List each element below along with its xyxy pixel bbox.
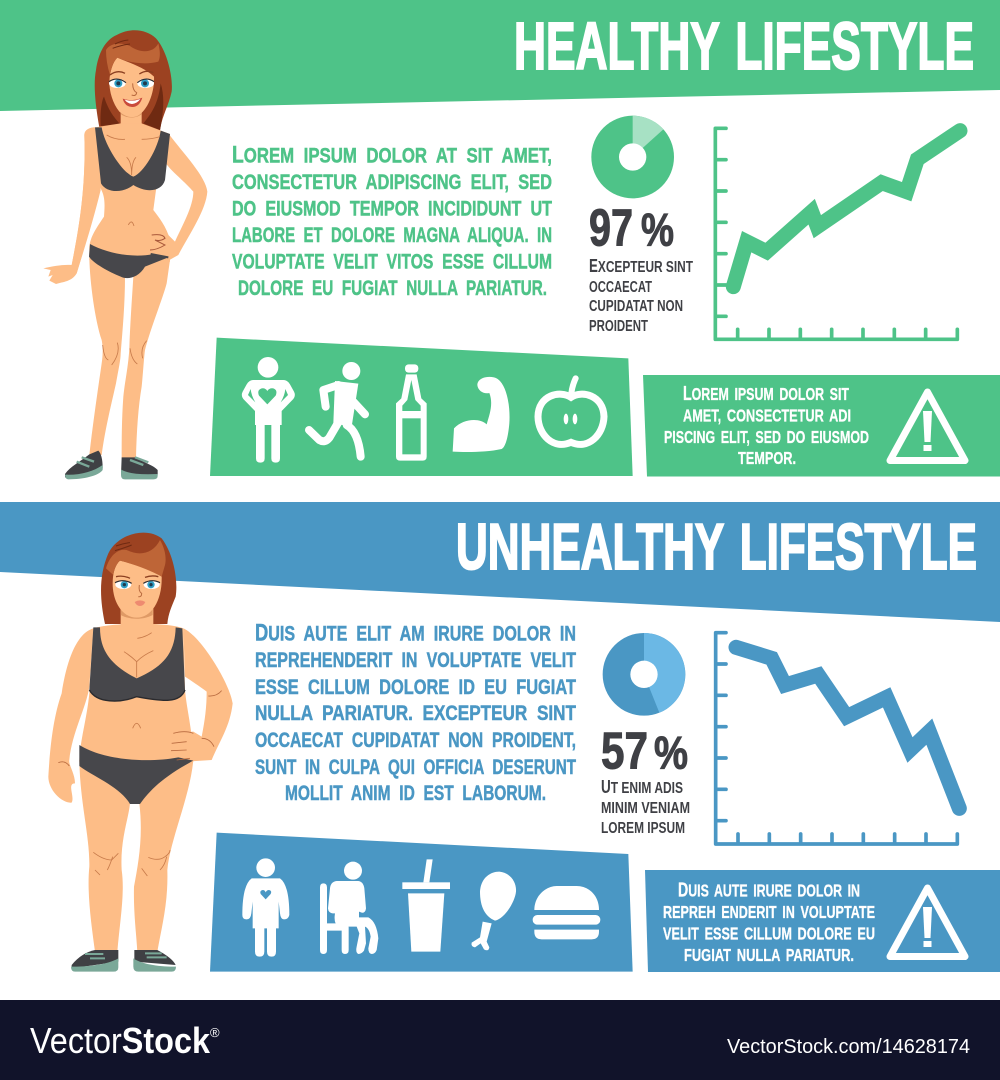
icon: overweight person with heart bbox=[242, 858, 289, 957]
callout text: TEMPOR. bbox=[738, 448, 796, 468]
stat: 97 percent: 97 bbox=[589, 200, 633, 258]
stat: 57 percent: 57 bbox=[601, 722, 648, 780]
text block: unhealthy description: MOLLIT ANIM ID EST LABORUM. bbox=[285, 782, 546, 805]
text block: unhealthy description: OCCAECAT CUPIDATAT NON PROIDENT, bbox=[255, 729, 576, 752]
text block: unhealthy description: NULLA PARIATUR. EXCEPTEUR SINT bbox=[255, 702, 576, 725]
panel: unhealthy lifestyle header band bbox=[0, 502, 1000, 622]
pie chart: healthy 97% bbox=[591, 116, 674, 198]
figure: slim woman bbox=[43, 30, 207, 479]
icon: healthy person with heart bbox=[242, 357, 295, 463]
panel: healthy icons bbox=[210, 338, 633, 476]
icon: warning triangle bbox=[890, 392, 965, 460]
text block: unhealthy description: ESSE CILLUM DOLORE ID EU FUGIAT bbox=[255, 676, 576, 699]
panel: healthy lifestyle header band bbox=[0, 0, 1000, 111]
line chart: healthy rising bbox=[715, 128, 960, 339]
stat caption: unhealthy: LOREM IPSUM bbox=[601, 820, 685, 837]
footer image id: VectorStock.com/14628174 bbox=[727, 1036, 970, 1058]
stat: 57 percent bbox=[601, 722, 688, 780]
callout text: LOREM IPSUM DOLOR SIT bbox=[683, 383, 849, 405]
footer registered mark: ® bbox=[210, 1025, 220, 1040]
callout text: DUIS AUTE IRURE DOLOR IN bbox=[678, 880, 860, 902]
text block: healthy description: DO EIUSMOD TEMPOR INCIDIDUNT UT bbox=[232, 198, 552, 220]
stat caption: healthy: OCCAECAT bbox=[589, 279, 652, 296]
footer: watermark bar bbox=[0, 1000, 1000, 1080]
stat caption: unhealthy: MINIM VENIAM bbox=[601, 800, 690, 817]
callout text bbox=[663, 880, 875, 965]
text block: unhealthy description bbox=[255, 620, 576, 805]
stat caption: healthy: PROIDENT bbox=[589, 318, 648, 335]
text block: unhealthy description: DUIS AUTE ELIT AM IRURE DOLOR IN bbox=[255, 620, 576, 646]
stat caption: unhealthy bbox=[601, 777, 690, 837]
icon: apple halved bbox=[538, 378, 604, 444]
callout: healthy warning bbox=[643, 375, 1000, 476]
callout: unhealthy warning bbox=[645, 870, 1000, 972]
stat: 97 percent bbox=[589, 200, 674, 258]
text block: healthy description: CONSECTETUR ADIPISCING ELIT, SED bbox=[232, 171, 552, 194]
text block: unhealthy description: REPREHENDERIT IN VOLUPTATE VELIT bbox=[255, 649, 576, 672]
stat caption: healthy: EXCEPTEUR SINT bbox=[589, 256, 693, 276]
text block: healthy description: LOREM IPSUM DOLOR AT SIT AMET, bbox=[232, 142, 552, 168]
stat caption: healthy bbox=[589, 256, 693, 335]
stat: 57 percent: % bbox=[654, 726, 688, 778]
icon: chicken drumstick bbox=[471, 872, 516, 950]
icon: flexed bicep bbox=[453, 377, 510, 452]
icon: water bottle bbox=[396, 364, 427, 461]
icon: warning triangle bbox=[890, 888, 965, 956]
text block: healthy description: VOLUPTATE VELIT VITOS ESSE CILLUM bbox=[232, 250, 552, 274]
stat caption: unhealthy: UT ENIM ADIS bbox=[601, 777, 683, 797]
text block: healthy description: LABORE ET DOLORE MAGNA ALIQUA. IN bbox=[232, 224, 552, 247]
footer brand: VectorStock bbox=[30, 1020, 211, 1061]
stat caption: healthy: CUPIDATAT NON bbox=[589, 298, 683, 315]
line chart: unhealthy falling bbox=[716, 633, 959, 844]
text block: healthy description bbox=[232, 142, 552, 300]
callout text bbox=[664, 383, 869, 468]
icon: soda cup with straw bbox=[402, 859, 450, 952]
pie chart: unhealthy 57% bbox=[603, 633, 685, 716]
icon: burger bbox=[533, 886, 600, 939]
callout text: VELIT ESSE CILLUM DOLORE EU bbox=[663, 924, 875, 944]
callout text: PISCING ELIT, SED DO EIUSMOD bbox=[664, 427, 869, 447]
callout text: REPREH ENDERIT IN VOLUPTATE bbox=[663, 902, 875, 922]
icon: runner bbox=[309, 362, 365, 457]
figure: overweight woman bbox=[48, 533, 233, 972]
callout text: FUGIAT NULLA PARIATUR. bbox=[684, 945, 854, 965]
text block: healthy description: DOLORE EU FUGIAT NULLA PARIATUR. bbox=[238, 277, 547, 300]
text block: unhealthy description: SUNT IN CULPA QUI OFFICIA DESERUNT bbox=[255, 756, 576, 779]
icon: person sitting on chair bbox=[320, 862, 378, 954]
callout text: AMET, CONSECTETUR ADI bbox=[683, 406, 851, 426]
panel: unhealthy icons bbox=[210, 833, 633, 972]
stat: 97 percent: % bbox=[641, 204, 674, 256]
